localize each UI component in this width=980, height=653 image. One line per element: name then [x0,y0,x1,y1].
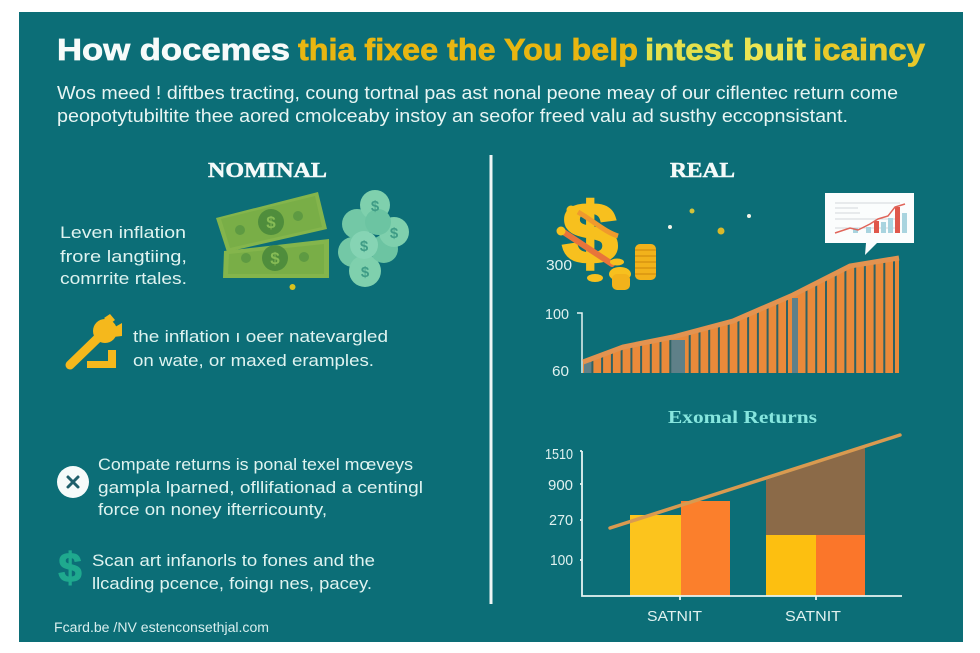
text block: nominal intro: Leven inflation [60,223,186,242]
axis labels: returns chart: SATNIT [785,608,841,625]
title: How docemes [57,32,290,67]
icon: coin cluster: $ [390,225,399,242]
footer source: Fcard.be /NV estenconsethjal.com [54,620,269,635]
title: intest [645,32,733,67]
text block: compare returns: gampla lparned, ofllifationad a centingl [98,478,423,497]
axis labels: returns chart [545,446,841,625]
callout: mini chart card [825,193,914,255]
text block: scan: Scan art infanorls to fones and the [92,551,375,570]
text block: nominal intro: comrrite rtales. [60,269,187,288]
title: buit [743,32,806,67]
text block: inflation note [133,327,388,370]
subheading: returns chart: Exomal Returns [668,407,817,427]
heading: real: REAL [670,158,735,182]
icon: gold dollar with coins: $ [562,186,618,282]
intro text [57,83,898,126]
icon: coin cluster: $ [360,238,369,255]
decorative dots [668,208,751,234]
area bar chart: real returns [545,250,899,380]
icon: wrench [70,314,122,368]
icon: coin cluster [338,190,409,287]
axis labels: returns chart: 100 [550,552,573,569]
axis labels: real chart: 100 [545,306,569,323]
icon: banknotes: $ [266,213,276,232]
text block: compare returns: Compate returns is ponal texel mœveys [98,455,413,474]
axis labels: returns chart: 270 [549,512,573,529]
icon: coin cluster: $ [371,198,380,215]
center divider [490,155,492,604]
title: icaincy [813,32,926,67]
title [57,32,926,67]
heading: nominal: NOMINAL [208,158,327,182]
bar chart: returns [545,435,902,625]
axis labels: real chart [545,257,572,380]
axis labels: returns chart: 900 [548,477,573,494]
icon: banknotes [216,192,329,290]
text block: nominal intro: frore langtiing, [60,247,187,266]
icon: banknotes: $ [270,249,280,268]
axis labels: real chart: 300 [546,257,572,274]
intro text: Wos meed ! diftbes tracting, coung tortnal pas ast nonal peone meay of our ciflentec return come [57,83,898,103]
axis labels: returns chart: 1510 [545,446,573,463]
title: thia fixee the You belp [298,32,638,67]
icon: dollar sign: $ [58,544,82,591]
text block: compare returns [98,455,423,519]
text block: nominal intro [60,223,187,288]
intro text: peopotytubiltite thee aored cmolceaby instoy an seofor freed valu ad susthy eccopnsistant. [57,106,848,126]
axis labels: real chart: 60 [552,363,569,380]
text block: compare returns: force on noney ifterricounty, [98,500,327,519]
text block: scan: llcading pcence, foingı nes, pacey. [92,574,372,593]
text block: inflation note: the inflation ı oeer natevargled [133,327,388,346]
icon: coin cluster: $ [361,264,370,281]
text block: scan [92,551,375,593]
text block: inflation note: on wate, or maxed eramples. [133,351,374,370]
icon: x badge [57,466,89,498]
icon: gold dollar with coins [556,186,656,290]
axis labels: returns chart: SATNIT [647,608,702,625]
